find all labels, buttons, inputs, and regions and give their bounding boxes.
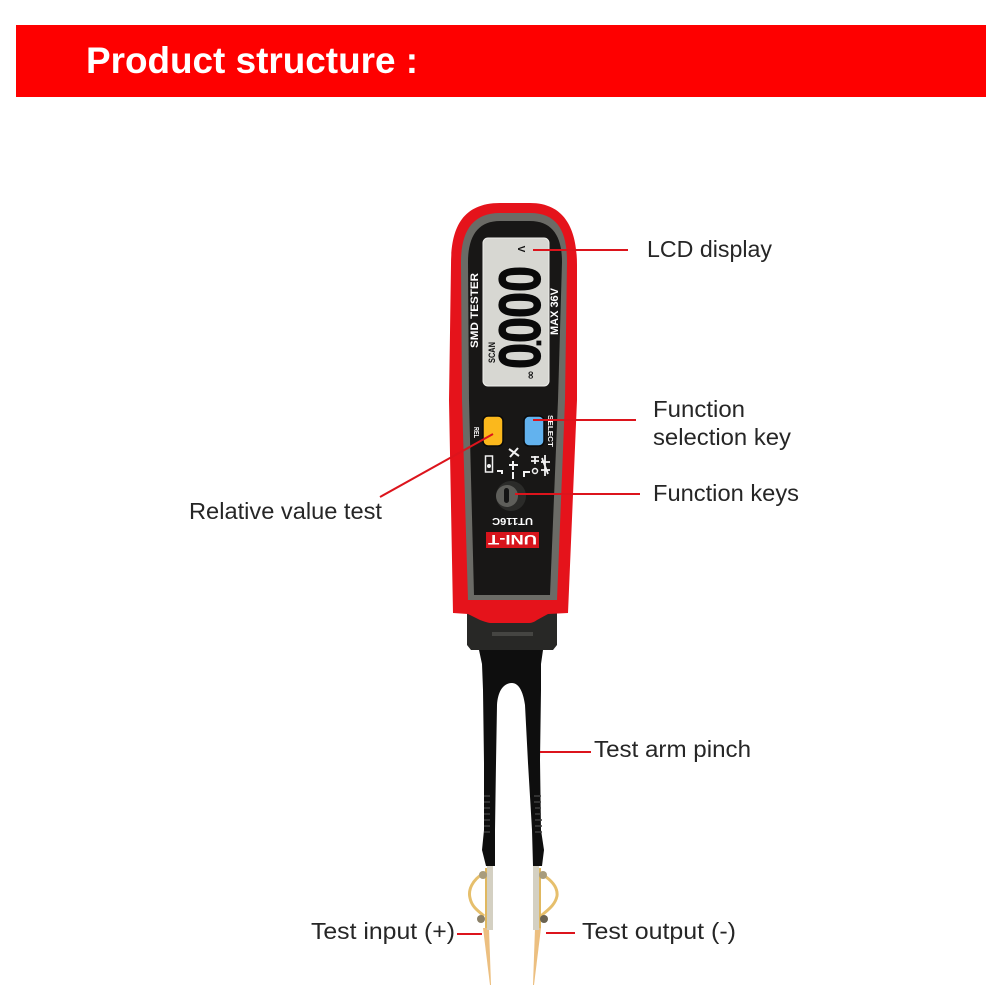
LCD digits: [488, 266, 553, 369]
LCD symbol: ∞: [524, 370, 537, 380]
label SELECT: SELECT: [546, 415, 555, 447]
function symbols: [486, 448, 550, 479]
label: Test input (+): Test input (+): [311, 918, 455, 944]
label: Function keys: Function keys: [653, 480, 799, 506]
label: Test output (-): Test output (-): [582, 918, 736, 944]
model UT116C: UT116C: [492, 515, 533, 527]
header banner: [16, 25, 986, 97]
label REL: REL: [472, 427, 479, 439]
black faceplate: [468, 221, 562, 595]
label SMD TESTER: SMD TESTER: [469, 273, 481, 348]
LCD digits: 0: [488, 343, 553, 369]
red housing: [449, 203, 577, 623]
label: LCD display: LCD display: [647, 236, 772, 262]
grey bezel: [461, 213, 567, 600]
blue SELECT key: [524, 416, 544, 446]
label: Test arm pinch: Test arm pinch: [594, 736, 751, 762]
UNI-T logo: UNI-T: [487, 532, 537, 548]
leader lines: [380, 250, 640, 934]
connector block: [467, 612, 557, 650]
LCD digits: 0: [488, 266, 553, 292]
label: Function selection key: selection key: [653, 424, 792, 450]
LCD unit V: V: [515, 246, 526, 253]
LCD screen: [483, 238, 553, 386]
function dial: [496, 481, 526, 511]
title: Product structure :: [86, 40, 418, 81]
test arm tweezers: [479, 650, 544, 866]
LCD SCAN: SCAN: [487, 342, 498, 363]
label: Function selection key: Function: [653, 396, 745, 422]
left test tip: [470, 866, 493, 985]
right test tip: [533, 866, 557, 985]
label MAX 36V: MAX 36V: [549, 287, 561, 335]
yellow REL key: [483, 416, 503, 446]
arm grip ribs: [484, 796, 542, 832]
LCD digits: .: [516, 339, 548, 347]
LCD digits: 0: [488, 317, 553, 343]
LCD digits: 0: [488, 292, 553, 318]
label: Function selection key: [653, 396, 792, 450]
label: Relative value test: Relative value test: [189, 498, 383, 524]
illustration: SMD tester device: [449, 203, 577, 985]
